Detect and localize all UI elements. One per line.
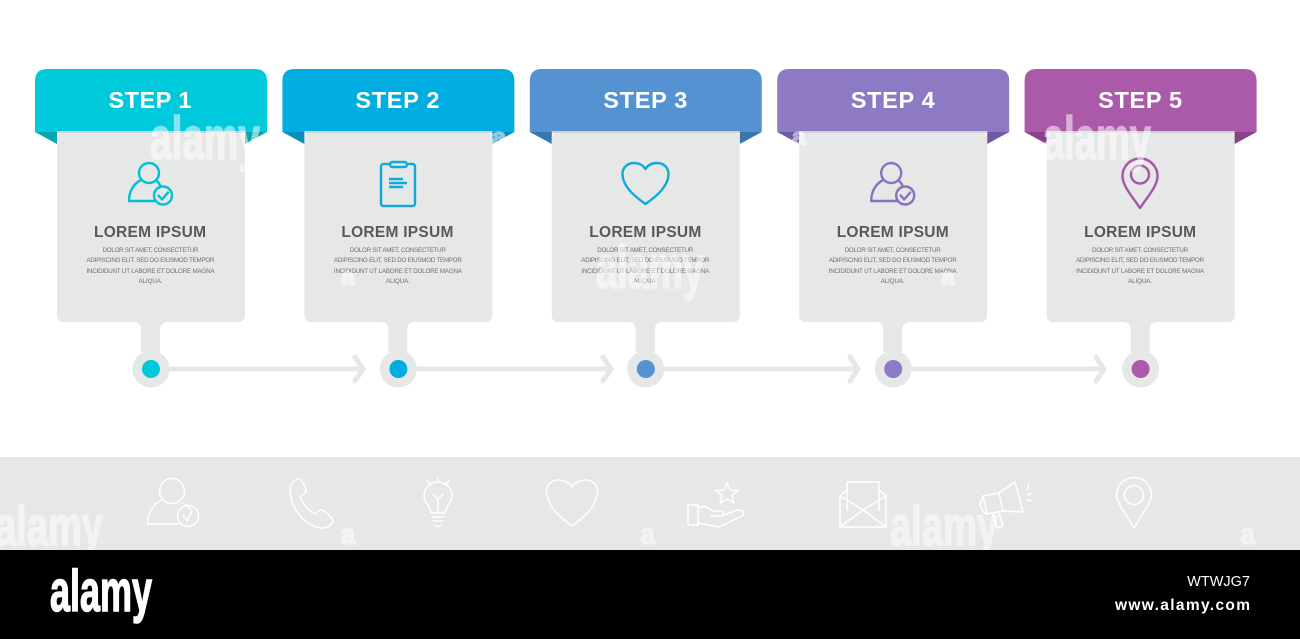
- step 3 description: INCIDIDUNT UT LABORE ET DOLORE MAGNA: [581, 268, 710, 275]
- watermarks: a: [492, 124, 507, 151]
- icon: heart: [622, 163, 668, 204]
- site url: www.alamy.com: [1114, 597, 1250, 614]
- step 2 description: DOLOR SIT AMET, CONSECTETUR: [350, 247, 446, 254]
- step 4 heading: STEP 4: [851, 87, 935, 113]
- step 2 title: LOREM IPSUM: [341, 224, 453, 241]
- footer logo: alamy: [50, 559, 152, 624]
- icon: user with check purple: [871, 163, 914, 204]
- arrow 4: [911, 357, 1104, 381]
- step 2 description: INCIDIDUNT UT LABORE ET DOLORE MAGNA: [334, 268, 463, 275]
- icon strip: [0, 457, 1300, 550]
- strip icon: map pin: [1116, 478, 1152, 528]
- strip icon: phone: [290, 479, 333, 528]
- step 1 description: ADIPISCING ELIT, SED DO EIUSMOD TEMPOR: [86, 257, 215, 264]
- watermarks: a: [941, 264, 956, 291]
- strip icon: light bulb: [424, 478, 452, 526]
- step 4 description: ALIQUA.: [881, 278, 905, 285]
- strip icon: heart: [546, 480, 598, 526]
- watermarks: a: [792, 124, 807, 151]
- step 2 description: [334, 247, 463, 285]
- icon: map pin: [1122, 158, 1158, 208]
- watermarks: [0, 105, 1255, 557]
- step 5 description: DOLOR SIT AMET, CONSECTETUR: [1092, 247, 1189, 254]
- panel: step 5: [1025, 69, 1257, 388]
- step 1 description: ALIQUA.: [138, 278, 163, 285]
- arrow 1: [169, 357, 363, 381]
- strip icon: hand and star: [688, 483, 744, 527]
- footer bar: [0, 550, 1300, 639]
- step 3 description: DOLOR SIT AMET, CONSECTETUR: [597, 247, 694, 254]
- step 5 description: ADIPISCING ELIT, SED DO EIUSMOD TEMPOR: [1076, 257, 1205, 264]
- panel: step 1: [35, 69, 267, 388]
- step 2 heading: STEP 2: [355, 87, 439, 113]
- step 4 description: ADIPISCING ELIT, SED DO EIUSMOD TEMPOR: [829, 257, 957, 264]
- arrow 2: [416, 357, 611, 381]
- step 2 description: ADIPISCING ELIT, SED DO EIUSMOD TEMPOR: [334, 257, 462, 264]
- step 5 heading: STEP 5: [1098, 87, 1182, 113]
- panel: step 4: [777, 69, 1009, 388]
- step 4 description: [829, 247, 958, 285]
- image id: WTWJG7: [1187, 574, 1250, 590]
- step 3 heading: STEP 3: [603, 87, 687, 113]
- step 1 description: INCIDIDUNT UT LABORE ET DOLORE MAGNA: [86, 268, 215, 275]
- watermarks: a: [1241, 518, 1255, 551]
- watermarks: alamy: [890, 494, 998, 557]
- panel: step 2: [282, 69, 514, 388]
- step 1 description: DOLOR SIT AMET, CONSECTETUR: [102, 247, 199, 254]
- step 1 title: LOREM IPSUM: [94, 224, 206, 241]
- strip icon: envelope: [840, 482, 886, 527]
- icon: user with check: [129, 163, 172, 204]
- watermarks: alamy: [596, 234, 704, 301]
- step 3 description: ADIPISCING ELIT, SED DO EIUSMOD TEMPOR: [581, 257, 710, 264]
- step 4 title: LOREM IPSUM: [837, 224, 949, 241]
- step 2 description: ALIQUA.: [386, 278, 410, 285]
- strip icon: megaphone: [980, 482, 1032, 528]
- step 5 title: LOREM IPSUM: [1084, 224, 1196, 241]
- strip icon: user: [148, 478, 198, 526]
- step 3 title: LOREM IPSUM: [589, 224, 701, 241]
- panel: step 3: [530, 69, 762, 388]
- step 1 heading: STEP 1: [108, 87, 192, 113]
- watermarks: a: [341, 518, 355, 551]
- step 3 description: ALIQUA.: [633, 278, 658, 285]
- step 4 description: DOLOR SIT AMET, CONSECTETUR: [845, 247, 941, 254]
- step 5 description: INCIDIDUNT UT LABORE ET DOLORE MAGNA: [1076, 268, 1205, 275]
- step 5 description: ALIQUA.: [1128, 278, 1152, 285]
- step 1 description: [86, 247, 215, 285]
- arrow 3: [663, 357, 858, 381]
- step 3 description: [581, 247, 710, 285]
- icon: clipboard: [381, 162, 415, 206]
- watermarks: alamy: [1043, 105, 1151, 172]
- step 4 description: INCIDIDUNT UT LABORE ET DOLORE MAGNA: [829, 268, 958, 275]
- watermarks: a: [641, 518, 655, 551]
- watermarks: a: [341, 264, 356, 291]
- watermarks: alamy: [150, 105, 260, 172]
- step 5 description: [1076, 247, 1205, 285]
